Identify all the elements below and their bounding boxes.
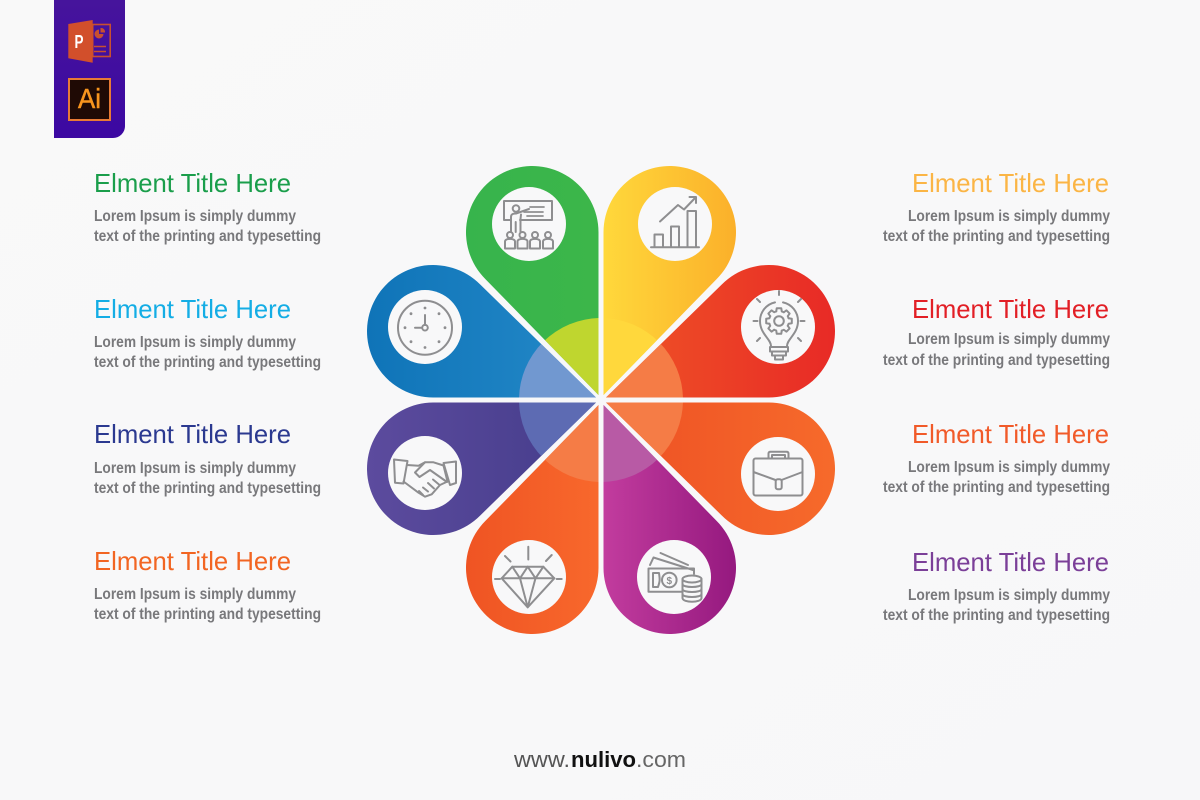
petal: green [466, 166, 598, 395]
petal: yellow [604, 166, 736, 395]
left text: green element: Lorem Ipsum is simply dummy [94, 208, 296, 225]
software badge tab [54, 0, 125, 138]
right text: red element: text of the printing and typesetting [883, 352, 1110, 369]
right text: yellow element [883, 168, 1110, 245]
icon: PowerPoint: P [74, 32, 84, 52]
icon: briefcase [754, 452, 802, 496]
left text: orange element [94, 546, 321, 623]
footer website address: nulivo [571, 747, 636, 772]
right text: red element: Lorem Ipsum is simply dummy [908, 331, 1110, 348]
left text: navy element: Lorem Ipsum is simply dummy [94, 460, 296, 477]
icon: money and coins [648, 553, 702, 602]
petal: lower orange [466, 405, 598, 634]
right text: orange element [883, 419, 1110, 496]
right text: yellow element: text of the printing and typesetting [883, 228, 1110, 245]
icon: light bulb with gear [754, 291, 804, 360]
right text: orange element: text of the printing and typesetting [883, 479, 1110, 496]
right text: purple element: Lorem Ipsum is simply dummy [908, 587, 1110, 604]
right text: yellow element: Lorem Ipsum is simply dummy [908, 208, 1110, 225]
left text: green element [94, 168, 321, 245]
left text: green element: text of the printing and typesetting [94, 228, 321, 245]
left text: navy element: Elment Title Here [94, 419, 291, 449]
left text: navy element [94, 419, 321, 497]
right text: purple element: text of the printing and typesetting [883, 607, 1110, 624]
petal: blue [367, 265, 596, 398]
flower diagram [367, 166, 835, 634]
left text: blue element: Elment Title Here [94, 294, 291, 324]
footer website address [513, 747, 686, 772]
left text: blue element: text of the printing and typesetting [94, 354, 321, 371]
left text: blue element [94, 294, 321, 371]
left text: orange element: Lorem Ipsum is simply dummy [94, 586, 296, 603]
right text: orange element: Lorem Ipsum is simply dummy [908, 459, 1110, 476]
petal: red [606, 265, 835, 398]
right text: orange element: Elment Title Here [912, 419, 1109, 449]
icon: handshake [394, 460, 456, 497]
icon: money and coins: $ [667, 576, 673, 587]
right text: red element [883, 294, 1110, 369]
icon: Illustrator: Ai [78, 83, 101, 114]
icon: growth chart [651, 197, 699, 247]
icon: clock [398, 301, 452, 355]
icon: presenter and audience [504, 201, 553, 248]
left text: green element: Elment Title Here [94, 168, 291, 198]
right text: purple element [883, 547, 1110, 624]
petal: right orange [606, 402, 835, 535]
left text: orange element: Elment Title Here [94, 546, 291, 576]
petal: purple [604, 405, 736, 634]
icon: diamond [495, 547, 562, 607]
right text: purple element: Elment Title Here [912, 547, 1109, 577]
left text: orange element: text of the printing and typesetting [94, 606, 321, 623]
footer website address: .com [636, 747, 686, 772]
left text: navy element: text of the printing and typesetting [94, 480, 321, 497]
left text: blue element: Lorem Ipsum is simply dummy [94, 334, 296, 351]
petal: navy [367, 402, 596, 535]
right text: yellow element: Elment Title Here [912, 168, 1109, 198]
footer website address: www. [513, 747, 570, 772]
right text: red element: Elment Title Here [912, 294, 1109, 324]
